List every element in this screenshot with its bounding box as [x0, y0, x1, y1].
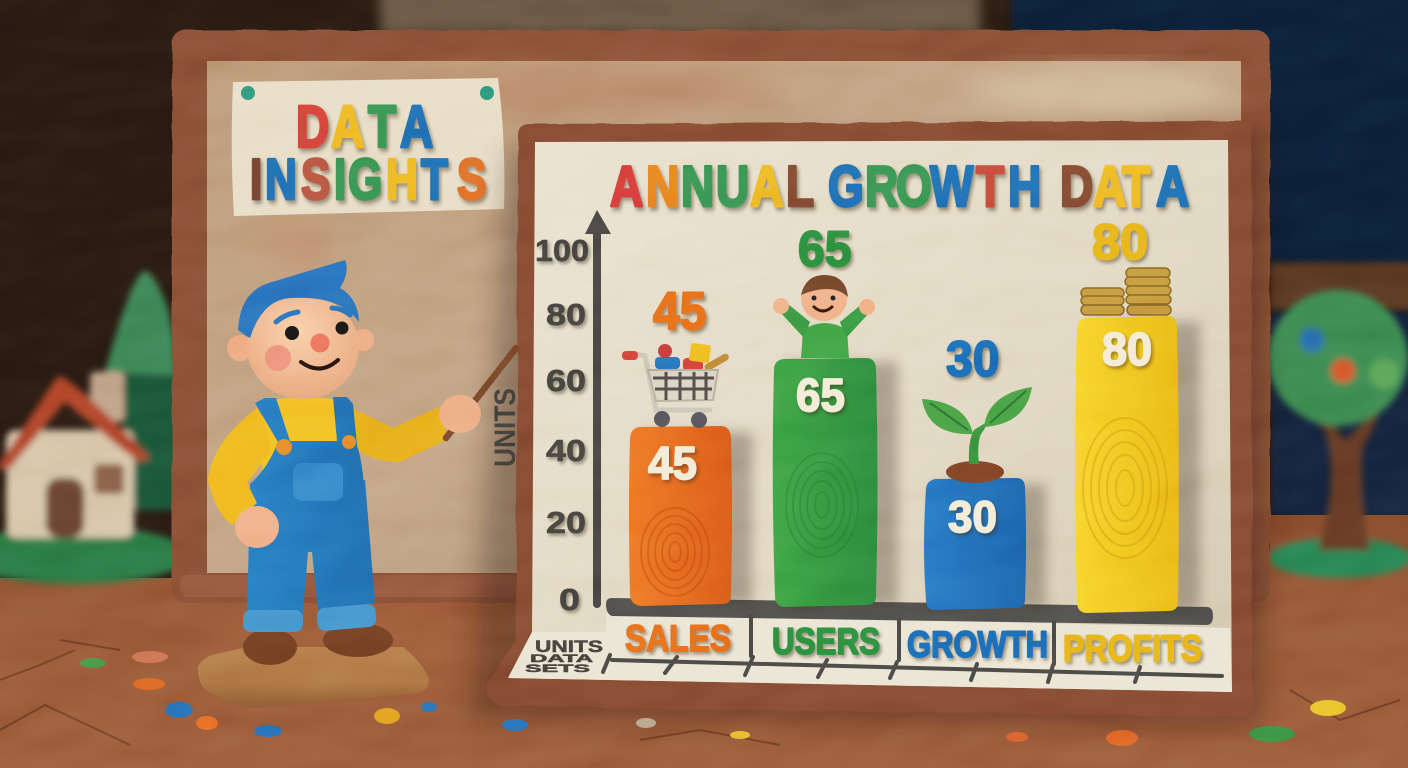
y axis	[489, 210, 611, 617]
sign line 2: I	[334, 147, 346, 211]
chart title: L	[786, 155, 814, 219]
bar: growth	[922, 331, 1032, 610]
shirt torso	[262, 397, 356, 485]
bar: growth: 30	[946, 331, 999, 387]
chart title: A	[1093, 155, 1126, 219]
chart title: W	[930, 155, 974, 219]
background scene left: house and tree	[0, 271, 190, 584]
bar: growth: 30	[948, 493, 997, 542]
y axis: 80	[546, 297, 586, 332]
chart title: G	[828, 155, 864, 219]
bar: profits: 80	[1102, 324, 1152, 375]
background wall	[0, 0, 1408, 610]
chart title: T	[1122, 155, 1150, 219]
sign line 2: I	[250, 147, 262, 211]
sign line 1: A	[400, 94, 433, 160]
chart title: D	[1060, 155, 1093, 219]
boots	[243, 629, 297, 665]
y axis: 40	[546, 433, 586, 468]
sign line 2: S	[457, 147, 486, 211]
bar: users	[773, 221, 878, 607]
bar: sales	[622, 281, 732, 606]
house	[0, 372, 150, 538]
right arm pointing	[352, 407, 446, 462]
x axis small label	[525, 637, 603, 675]
x axis small label: DATA	[530, 653, 593, 665]
legs	[247, 480, 375, 614]
chart title: N	[646, 155, 679, 219]
overalls bib	[250, 397, 365, 515]
background tree right	[1268, 290, 1408, 578]
sign line 2: S	[301, 147, 330, 211]
x axis small label: UNITS	[535, 637, 603, 656]
sign line 2: G	[348, 147, 382, 211]
panel: front chart board	[470, 121, 1262, 725]
bar: sales: 45	[653, 281, 706, 341]
bar: profits	[1075, 213, 1179, 613]
scattered clay bits	[80, 651, 1346, 746]
character: boy with pointer	[198, 260, 516, 708]
bar: sales: 45	[648, 437, 697, 489]
tree left	[105, 271, 178, 510]
chart title: R	[865, 155, 898, 219]
x axis small label: SETS	[525, 663, 590, 675]
icon: sprout	[922, 387, 1032, 483]
sign line 2: T	[421, 147, 448, 211]
sign: data insights	[232, 78, 504, 216]
floor	[0, 515, 1408, 768]
sign line 1: D	[296, 94, 329, 160]
y axis: 60	[546, 363, 586, 398]
bar: users: 65	[798, 221, 851, 277]
chart title: T	[976, 155, 1004, 219]
y axis: 100	[535, 233, 589, 268]
x axis category labels: SALES	[625, 618, 731, 660]
grass left	[0, 526, 190, 584]
left arm	[208, 408, 270, 525]
chart title: A	[750, 155, 783, 219]
y axis: 0	[559, 582, 580, 617]
y axis: 20	[546, 505, 586, 540]
x axis dividers and ruler	[603, 616, 1222, 682]
x axis category labels: USERS	[772, 621, 880, 663]
y axis label: UNITS	[489, 388, 522, 467]
chart title: H	[1008, 155, 1041, 219]
chart title: A	[1156, 155, 1189, 219]
chart title: N	[681, 155, 714, 219]
x axis category labels	[625, 618, 1202, 670]
sign line 1: A	[331, 94, 364, 160]
bar: users: 65	[796, 369, 845, 421]
x axis category labels: PROFITS	[1063, 628, 1202, 670]
x axis shelf	[606, 598, 1213, 625]
chart title: U	[716, 155, 749, 219]
icon: person figure	[773, 275, 875, 358]
chart title: A	[610, 155, 643, 219]
icon: coins	[1081, 268, 1171, 315]
sign line 2: H	[386, 147, 418, 211]
bar: profits: 80	[1092, 213, 1148, 270]
hand and pointer	[439, 348, 516, 438]
base stone	[198, 647, 429, 708]
icon: shopping cart	[622, 343, 730, 428]
sign line 2: N	[265, 147, 297, 211]
sign line 1: T	[368, 94, 396, 160]
head	[227, 260, 374, 399]
panel: back board	[172, 30, 1270, 603]
chart title: O	[896, 155, 932, 219]
x axis category labels: GROWTH	[907, 624, 1048, 666]
bar shadows	[640, 322, 1200, 610]
